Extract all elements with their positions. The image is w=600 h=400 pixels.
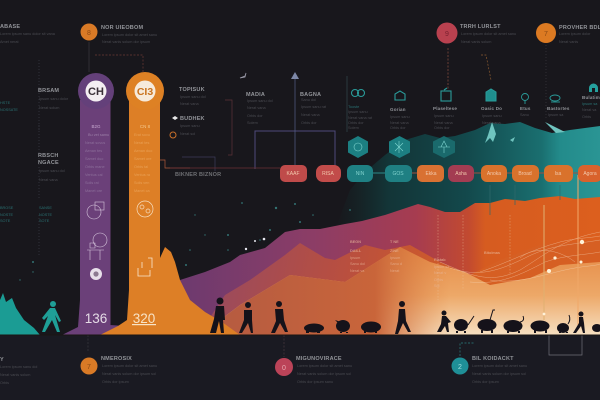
text: footer crimson note [296, 356, 352, 384]
timeline pills: Asha [455, 171, 467, 177]
animal 8 [557, 315, 570, 333]
circle: footer teal: 2 [458, 364, 462, 371]
text: teal note 1: Ipsum sanu [348, 110, 368, 114]
column: orange: CI3 [137, 86, 153, 98]
text: note 3: Plaseltese [433, 106, 457, 111]
animal 3 [361, 322, 381, 333]
heading: top left: Amet nerat [0, 40, 20, 44]
text: orange top right note [559, 25, 600, 44]
column: orange: Nerat tes [134, 141, 150, 145]
text: footer teal note [472, 356, 527, 384]
text: MADIA: MADIA [246, 92, 265, 98]
labels in chart 4: Bitolmas [484, 251, 500, 255]
column: purple: Bu vet samu [88, 133, 109, 137]
text: lower left teal note: SOTE [0, 219, 11, 223]
column: purple [78, 73, 114, 326]
text: MADIA: Nerat vana [247, 106, 266, 110]
text: footer orange note: NMEROSIX [101, 356, 132, 362]
text: note 6: Ipsum sa [548, 113, 564, 117]
column: purple: Manet ore [85, 189, 102, 193]
text: lower left teal note: BROSE [0, 206, 14, 210]
heading: top left: ABASE [0, 24, 20, 30]
circle: crimson top: 9 [445, 31, 449, 38]
labels in chart 2 [390, 240, 402, 273]
circle: top orange: 8 [87, 30, 91, 37]
text: footer orange note: Orbis dor ipsum [102, 380, 129, 384]
labels in chart 2: Ipsum [390, 256, 400, 260]
labels in chart 2: Sanu d [390, 262, 402, 266]
labels in chart 3: Ipsum sa [434, 265, 450, 269]
text: footer teal note: BIL KOIDACKT [472, 356, 514, 362]
circle: footer teal [452, 358, 468, 374]
text: teal note 2: Nerat vana [390, 121, 409, 125]
circle: crimson top [436, 22, 458, 44]
column: orange: Solis ven [134, 181, 149, 185]
icon: desk and chair [87, 233, 107, 260]
text: BAGNA [300, 92, 327, 125]
icon: teal glyph 7 [589, 84, 598, 92]
text: lower left teal note: SANSE [39, 206, 52, 210]
circle: footer crimson [275, 358, 293, 376]
animal 5 [478, 310, 496, 333]
human 4 [395, 301, 411, 334]
icon: small orange dot [170, 132, 176, 138]
number: 320: 320 [133, 311, 155, 326]
text: BRSAM note: Nerat solum [39, 106, 59, 110]
hexagons [348, 136, 455, 158]
text: crimson note [460, 24, 516, 44]
number: 136: 136 [85, 311, 107, 326]
labels in chart 2: T NE [390, 240, 399, 244]
text: note 4: Oasic Do [481, 106, 502, 111]
footer note left: Lorem ipsum sanu dol [0, 365, 38, 369]
connector lines [39, 42, 582, 357]
icon: teal glyph 3 [441, 88, 451, 101]
text: crimson note: Nerat vanis solum [461, 40, 491, 44]
text: note 6: Bastortes [547, 106, 570, 111]
text: teal note 2: Gorian [390, 107, 406, 112]
icon: teal glyph 1 [352, 90, 364, 96]
text: footer teal note: Lorem ipsum dolor sit amet sanu [472, 364, 527, 368]
animal 4 [454, 316, 474, 333]
text: note 7 [582, 95, 600, 119]
labels in chart: BEGN [350, 240, 361, 244]
human 2 [239, 302, 253, 333]
text: note 3: Orbis dor [434, 126, 450, 130]
text: TOPISUK note [179, 87, 206, 106]
glowing nodes [543, 240, 584, 315]
text: top orange note: NOR UIEOBOM [101, 25, 143, 31]
labels in chart: Ipsum [350, 256, 360, 260]
animal 1 [304, 324, 324, 333]
column: purple: Ventus cal [85, 173, 103, 177]
text: lower left teal note: NOSTE [39, 213, 53, 217]
timeline pills: GOS [392, 171, 404, 177]
footer band [0, 335, 600, 400]
text: RIBSECH note [38, 153, 65, 182]
text: teal note 1: Tooste [348, 105, 359, 109]
text: teal note 1: Solem [348, 126, 359, 130]
text: TOPISUK note: Nerat vana [180, 102, 199, 106]
icon: teal glyph 5 [522, 94, 528, 104]
chart: pale lower mountain layer [200, 247, 600, 335]
text: BAGNA: BAGNA [300, 92, 321, 98]
footer note left: Y [0, 357, 4, 363]
text: footer teal note: Orbis dor ipsum [472, 380, 499, 384]
animal 9 [592, 324, 600, 332]
text: BRSAM note: Ipsum sanu dolor [39, 97, 69, 101]
walking teal figure [42, 301, 61, 332]
column: purple: Samet duo [85, 157, 103, 161]
column: orange: Samet ore [134, 157, 152, 161]
text: note 4: Ipsum sanu [482, 114, 502, 118]
chart: teal left mountain [0, 293, 40, 335]
text: footer orange note: Nerat vanis solum dor ipsum sol [102, 372, 156, 376]
labels in chart 3: Sol [434, 284, 440, 288]
icon: white marker and note: Nerat sol [180, 132, 195, 136]
circle: orange top right: 7 [544, 31, 548, 38]
pill connectors [373, 172, 578, 174]
chart: mid mountain layer [205, 240, 600, 335]
text: note 3: Ipsum sanu [434, 114, 454, 118]
text: note 6 [547, 106, 570, 117]
text: lower left teal note [0, 206, 53, 223]
text: note 7: Ipsum sa [582, 102, 598, 106]
text: TOPISUK note: TOPISUK [179, 87, 205, 93]
text: MADIA [246, 92, 273, 125]
text: teal note 1: Nerat vana rat [348, 116, 373, 120]
text: BRSAM note: BRSAM [38, 88, 59, 94]
text: MADIA: Ipsum sanu dol [247, 99, 273, 103]
text: footer crimson note: MIGUNOVIRACE [296, 356, 342, 362]
human 1 [210, 298, 225, 333]
labels in chart 3 [434, 258, 450, 288]
heading: top left: Lorem ipsum sanu dolor sit vana [0, 32, 56, 36]
text: note 3 [433, 106, 457, 130]
animal 2 [335, 320, 350, 333]
text: MADIA: Solem [247, 121, 258, 125]
icon: white badge [90, 268, 102, 280]
labels in chart 3: Orbis [434, 278, 443, 282]
text: teal note 2: Ipsum sanu [390, 115, 410, 119]
text: caption by timeline: BIKNER BIZNOR [175, 172, 221, 178]
text: RIBSECH note: Nerat vana [39, 178, 58, 182]
icon: white marker and note: BUDHEK [180, 116, 205, 122]
text: top orange note: Lorem ipsum dolor sit amet sanu [102, 33, 157, 37]
text: note 4: Nerat vana [482, 121, 501, 125]
column: purple: Orbis mane [85, 165, 105, 169]
text: note 4 [481, 106, 502, 125]
timeline pills [280, 165, 600, 182]
text: MADIA: Orbis dor [247, 114, 263, 118]
text: teal note 2: Orbis dor [390, 126, 406, 130]
icon: brain circle [137, 201, 153, 217]
text: top orange note [101, 25, 157, 44]
text: RIBSECH note: RBSCH [38, 153, 59, 159]
text: footer crimson note: Lorem ipsum dolor sit amet sanu [297, 364, 352, 368]
timeline pills: KAAF [286, 171, 300, 177]
labels in chart 2: ZINE [390, 249, 399, 253]
chart: magenta to orange mountain [180, 196, 600, 335]
text: footer orange note [101, 356, 157, 384]
icon: teal glyph 2 [395, 91, 405, 100]
text: footer crimson note: Nerat vanis solum dor ipsum sol [297, 372, 351, 376]
labels in chart: DAILL [350, 249, 362, 253]
column: orange: Ventus ra [134, 173, 151, 177]
column: orange: CN 8 [140, 124, 151, 129]
text: note 7: Bulatim [582, 95, 600, 100]
icon: teal glyph 6 [550, 95, 560, 102]
text: teal note 1: Orbis dor [348, 121, 364, 125]
arrow: up [291, 72, 299, 79]
text: crimson note: Lorem ipsum dolor sit amet sanu [461, 32, 516, 36]
circle: footer orange [80, 358, 98, 374]
circle: footer orange: 7 [87, 364, 91, 371]
labels in chart 2: Nerat [390, 269, 400, 273]
icon: small bird [240, 73, 246, 78]
circle: footer crimson: 0 [282, 365, 286, 372]
timeline pills: Broad [518, 171, 532, 177]
text: footer orange note: Lorem ipsum dolor sit amet sanu [102, 364, 157, 368]
text: note 7: Orbis [582, 115, 591, 119]
column: orange: Orbis tal [134, 165, 148, 169]
footer note left: Orbis [0, 381, 9, 385]
text: TOPISUK note: Ipsum sanu dol [180, 95, 206, 99]
circle: orange top right [536, 23, 556, 43]
labels in chart: Sanu dol [350, 262, 365, 266]
text: left teal note: HSTE [0, 101, 11, 105]
text: BAGNA: Sanu dol [301, 98, 316, 102]
text: RIBSECH note: Ipsum sanu dol [39, 169, 65, 173]
text: note 7: Nerat va [582, 108, 597, 112]
labels in chart [350, 240, 365, 273]
column: orange: Aenan duo [134, 149, 152, 153]
text: note 5: Etus [520, 106, 531, 111]
labels in chart: Nerat va [350, 269, 365, 273]
column: orange: Manet ca [134, 189, 151, 193]
timeline pills: RISA [322, 171, 334, 177]
icon: head outline [87, 202, 104, 219]
text: teal note 2 [390, 107, 410, 130]
text: footer crimson note: Orbis dor ipsum sanu [297, 380, 333, 384]
text: footer teal note: Nerat vanis solum dor ipsum sol [472, 372, 526, 376]
text: lower left teal note: SOTE [39, 219, 50, 223]
chart: white contour lines [440, 232, 600, 283]
text: BRSAM note [38, 88, 69, 110]
timeline pills: Agora [583, 171, 597, 177]
ground line [0, 334, 600, 336]
teal birds [485, 122, 565, 143]
animal 6 [504, 316, 524, 333]
timeline pills: Anoka [487, 171, 501, 177]
text: note 5: Sanu [520, 113, 529, 117]
timeline pills: NIN [356, 171, 365, 177]
heading: top left [0, 24, 56, 44]
column: purple: CH [88, 86, 104, 98]
text: orange top right note: Lorem ipsum dolor [559, 32, 591, 36]
text: BAGNA: Nerat vana [301, 113, 320, 117]
text: note 3: Nerat vana [434, 121, 453, 125]
text: lower left teal note: NOSTE [0, 213, 14, 217]
text: orange top right note: PROVHER BDL [559, 25, 600, 31]
column: purple: B2G [91, 124, 101, 129]
silhouettes: human evolution [210, 298, 600, 334]
text: BAGNA: Ipsum sanu rat [301, 105, 327, 109]
star field [19, 202, 351, 281]
column: purple: Aenan tes [85, 149, 102, 153]
icon: teal glyph 4 [486, 89, 496, 101]
chart: orange column base and peak [100, 247, 240, 335]
icon: white marker and note: Ipsum sanu [180, 124, 200, 128]
column: purple: Solis rat [85, 181, 100, 185]
timeline pills: Isa [555, 171, 562, 177]
text: BAGNA: Orbis dor [301, 121, 317, 125]
hexagon glyphs [354, 141, 450, 153]
labels in chart 3: Nerat v [434, 271, 446, 275]
text: left teal note: NOSSATE [0, 108, 18, 112]
circle: top orange [80, 24, 98, 40]
labels in chart 3: Ristab [434, 258, 446, 262]
column: orange: Erat sovu [134, 133, 150, 137]
column: purple: Nerat sovus [85, 141, 105, 145]
chart: teal back mountains [335, 122, 600, 240]
footer note left [0, 357, 38, 385]
text: top orange note: Nerat vanis solum dor ipsum [102, 40, 150, 44]
column: orange [126, 72, 164, 330]
icon: machine [138, 258, 152, 276]
text: teal note 1 [348, 105, 373, 130]
human 5 [437, 310, 451, 332]
footer note left: Nerat vanis solum [0, 373, 30, 377]
timeline pills: Ekka [425, 171, 437, 177]
text: orange top right note: Nerat vanis [559, 40, 578, 44]
text: left teal note [0, 101, 18, 112]
chart: orange shading over lower layer [200, 247, 450, 335]
text: RIBSECH note: NGACE [38, 160, 59, 166]
text: crimson note: TRRH LURLST [460, 24, 501, 30]
chart: purple column base [62, 300, 128, 335]
icon: white marker and note [172, 116, 205, 136]
text: note 5 [520, 106, 531, 117]
animal 7 [530, 320, 550, 333]
highlight dots on ridge [245, 238, 293, 265]
human 6 [573, 312, 585, 333]
human 3 [271, 301, 288, 333]
